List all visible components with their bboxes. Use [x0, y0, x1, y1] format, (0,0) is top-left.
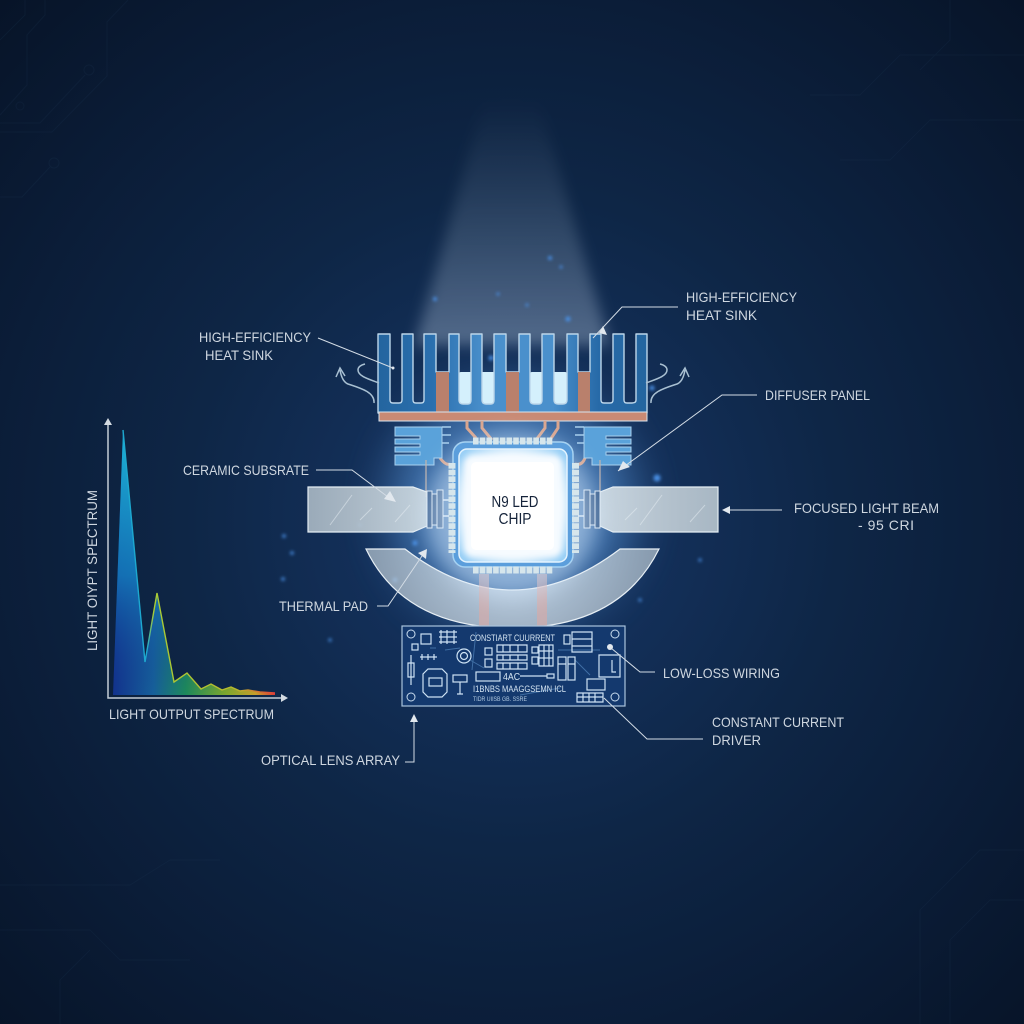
label: constant current driver: [712, 714, 844, 748]
chip label: N9 LED: [492, 494, 538, 511]
label: left heat sink: HEAT SINK: [205, 347, 274, 363]
label: right heat sink: [686, 289, 798, 323]
chip inner frame: [459, 449, 567, 562]
right diffuser panel: [578, 487, 718, 532]
LED chip: [452, 441, 576, 570]
label: left heat sink: [199, 329, 312, 363]
chip pads: [452, 441, 576, 570]
label: ceramic substrate: CERAMIC SUBSRATE: [183, 462, 309, 478]
PCB components: [408, 630, 620, 702]
PCB small text: TIDR UIISB GB. SSRE: [473, 697, 527, 703]
chart axes: [108, 420, 284, 698]
PCB board: [402, 626, 625, 706]
copper inserts: [436, 372, 590, 412]
label: diffuser panel: DIFFUSER PANEL: [765, 387, 870, 403]
chip label: [492, 494, 538, 528]
leader arrowheads: [384, 326, 730, 722]
spectrum highlight: [113, 430, 275, 695]
heat sink light windows: [459, 372, 567, 404]
chip housing: [453, 442, 573, 567]
label: right heat sink: HEAT SINK: [686, 307, 758, 323]
vertical traces: [479, 574, 547, 626]
left clip block: [395, 427, 451, 497]
x axis label: LIGHT OUTPUT SPECTRUM: [109, 706, 274, 722]
PCB title text: CONSTIART CUURRENT: [470, 633, 555, 643]
constant current driver PCB: [402, 626, 625, 706]
label: right heat sink: HIGH-EFFICIENCY: [686, 289, 798, 305]
chip halo: [464, 455, 562, 557]
spectrum chart: [84, 418, 288, 722]
y axis arrowhead: [104, 418, 112, 425]
label: optical lens array: OPTICAL LENS ARRAY: [261, 752, 401, 768]
PCB faint traces: [430, 632, 600, 695]
label: focused light beam: - 95 CRI: [858, 517, 914, 533]
chip label: CHIP: [498, 511, 532, 528]
label: thermal pad: THERMAL PAD: [279, 598, 368, 614]
optical arc lens: [366, 549, 659, 628]
y axis label: LIGHT OIYPT SPECTRUM: [84, 490, 100, 651]
label: focused light beam: [794, 500, 939, 533]
label: constant current driver: CONSTANT CURRENT: [712, 714, 844, 730]
heat sink: [378, 334, 647, 421]
lower chip light bloom: [427, 433, 597, 597]
spectrum fill: [113, 430, 275, 695]
label: left heat sink: HIGH-EFFICIENCY: [199, 329, 312, 345]
airflow arrows: [336, 364, 689, 403]
copper base bar: [379, 412, 647, 421]
heat sink fins: [378, 334, 647, 413]
chip core: [471, 462, 554, 550]
label: low-loss wiring: LOW-LOSS WIRING: [663, 665, 780, 681]
x axis arrowhead: [281, 694, 288, 702]
label: focused light beam: FOCUSED LIGHT BEAM: [794, 500, 939, 516]
PCB text line: I1BNBS MAAGGSEMN ICL: [473, 684, 566, 694]
spectrum curve: [123, 430, 275, 693]
PCB mounting holes: [407, 630, 619, 701]
sparkle particles: [281, 256, 702, 642]
chip glow: [392, 390, 632, 620]
PCB part text: 4AC: [503, 672, 520, 683]
leader lines: [316, 307, 782, 762]
light beam: [415, 100, 610, 345]
right clip block: [575, 427, 631, 497]
copper traces top: [440, 421, 585, 464]
left diffuser panel: [308, 487, 449, 532]
label: constant current driver: DRIVER: [712, 732, 761, 748]
